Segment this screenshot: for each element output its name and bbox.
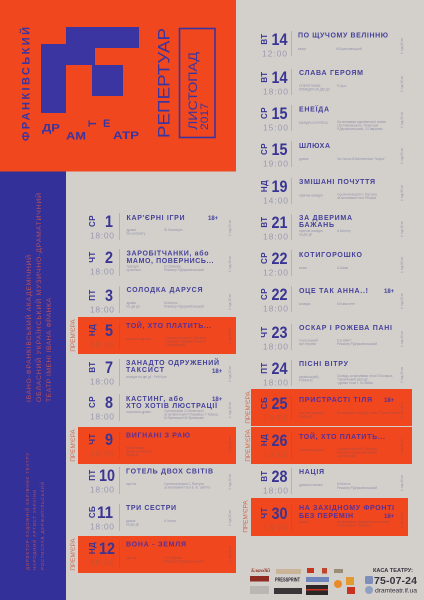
premiere row: 12: ПРЕМ'ЄРА <box>70 538 77 571</box>
row: 15 evening <box>260 140 404 168</box>
premiere row: 9: трагікомедія <box>126 446 145 450</box>
row: 15 evening: СР <box>260 143 269 155</box>
row: 23: арт-терапія <box>299 342 316 346</box>
premiere row: 30: Е.М.Ремарка. Режисер <box>337 524 371 528</box>
row: 11: на дві дії <box>126 522 139 526</box>
row: 28: 18:00 <box>263 486 288 496</box>
row: 22 evening: СР <box>260 288 269 300</box>
icon: globe <box>365 586 373 594</box>
row: 15 afternoon <box>260 104 404 132</box>
premiere row: 30: драма <box>299 520 309 524</box>
row: 10: 10 <box>99 466 115 485</box>
premiere row: 5: соціальна драма <box>126 337 151 341</box>
text: director: РОСТИСЛАВ ДЕРЖИПІЛЬСЬКИЙ <box>40 482 45 570</box>
row: 3: ПТ <box>88 289 97 301</box>
row: 15 afternoon: І.Котляревського. Режисери <box>337 124 378 128</box>
premiere row: 9: на дві дії <box>126 453 139 457</box>
premiere row: 5: Режисер Р.Держипільський <box>166 340 206 344</box>
premiere row: 12: НД <box>88 542 97 554</box>
row: 8: М.Яремишин Ж.Яремишин <box>164 416 204 420</box>
row: 15 evening: 19:00 <box>263 158 288 168</box>
panel: orange header <box>0 0 236 172</box>
premiere row: 25: на дві дії <box>299 414 312 418</box>
row: 3: 3 <box>105 286 113 305</box>
row: 11: А.Чехов <box>164 519 176 523</box>
row: 11: 11 <box>97 503 113 522</box>
row: 3: СОЛОДКА ДАРУСЯ <box>126 287 202 294</box>
premiere row: 9: 2 год 30 хв <box>228 437 232 453</box>
row: 8: 8 <box>105 393 113 412</box>
row: 8: КАСТИНГ, або <box>126 395 183 403</box>
row: 19: за мотивами п'єси Р.Баєра <box>337 196 376 200</box>
label: каса театру: КАСА ТЕАТРУ: <box>373 568 413 574</box>
row: 2: 18:00 <box>90 266 114 276</box>
premiere row: 26: 18:00 <box>263 450 288 460</box>
row: 15 afternoon: 2 год 30 хв <box>400 112 404 128</box>
row: 22 evening <box>260 285 404 314</box>
month box: 2017 <box>199 103 211 130</box>
text: director: ДИРЕКТОР-ХУДОЖНІЙ КЕРІВНИК ТЕАТРУ <box>25 453 30 570</box>
row: 21: 18:00 <box>263 232 288 242</box>
phone number: 75-07-24 <box>374 575 417 587</box>
premiere row: 12: О.Стефаник <box>164 556 183 560</box>
premiere row: 5: Сценічна версія Є.Лісіцина <box>166 336 206 340</box>
row: 21: 21 <box>272 213 288 232</box>
row: 15 afternoon: ЕНЕЇДА <box>299 106 329 114</box>
row: 19: Сценічна версія С.Пастуха <box>337 192 377 196</box>
premiere row: 5: 5 <box>105 321 113 340</box>
row: 14 tue evening: ОПЕРЕТКОВА <box>299 84 321 88</box>
row: 14 tue evening: 18:00 <box>263 86 288 96</box>
row: 7: комедія на дві дії · Рей Куні <box>126 375 167 379</box>
row: 15 afternoon: Р.Держипільський, О.Гаврилюк <box>337 127 383 131</box>
row: 7: ВТ <box>88 361 97 373</box>
row: 1: без антракту <box>126 232 146 236</box>
premiere row: 12: притча <box>126 556 136 560</box>
row: 21: лірична комедія <box>299 229 323 233</box>
premiere row: 5: ТОЙ, ХТО ПЛАТИТЬ... <box>126 321 211 330</box>
row: 8: соціальна драма <box>126 410 151 414</box>
row: 23: Режисер Р.Держипільський <box>337 342 377 346</box>
premiere row: 25: ПРЕМ'ЄРА <box>245 391 252 424</box>
row: 15 evening: 15 <box>272 140 288 159</box>
row: 22 noon: КОТИГОРОШКО <box>299 252 363 259</box>
premiere row: 12: 1 год 30 хв <box>228 546 232 562</box>
row: 23: ОСКАР І РОЖЕВА ПАНІ <box>299 325 392 332</box>
row: 8: СР <box>88 396 97 408</box>
row: 24: Сповідь за мотивами п'єси П.Козирка <box>337 374 393 378</box>
row: 1: 1 год 20 хв <box>228 220 232 236</box>
premiere row: 30: ПРЕМ'ЄРА <box>242 500 250 533</box>
row: 19: лірична комедія <box>299 194 323 198</box>
row: 14 tue noon <box>260 30 404 58</box>
row: 21: БАЖАНЬ <box>299 222 334 229</box>
row: 15 evening: ШЛЮХА <box>299 143 330 150</box>
row: 10: 2 год 20 хв <box>228 474 232 490</box>
row: 14 tue evening: 14 <box>272 68 288 87</box>
premiere row: 30: 18:00 <box>263 522 288 532</box>
sponsor logos <box>250 567 355 595</box>
row: 3: драма <box>126 301 136 305</box>
row: 23: театральний <box>299 338 318 342</box>
premiere row: 5: Сценографія <box>166 343 185 347</box>
row: 1: драма <box>126 228 136 232</box>
row: 19: ЗМІШАНІ ПОЧУТТЯ <box>299 179 375 186</box>
text: director: НАРОДНИЙ АРТИСТ УКРАЇНИ <box>32 490 37 570</box>
row: 22 evening: 18:00 <box>263 304 288 314</box>
premiere row: 25: За мотивами твору Е. Золя "Тереза Ракен" <box>337 411 400 415</box>
row: 11: драма <box>126 519 136 523</box>
premiere row: 9: ВИГНАНІ З РАЮ <box>126 433 190 440</box>
row: 11: 18:00 <box>90 522 114 532</box>
row: 7: 18:00 <box>90 376 114 386</box>
text: theatre name: ТЕАТР ІМЕНІ ІВАНА ФРАНКА <box>46 298 53 402</box>
premiere row: 26: ПРЕМ'ЄРА <box>245 429 252 462</box>
row: 22 noon: казка <box>299 266 307 270</box>
row: 7: 18+ <box>212 369 223 375</box>
heading: репертуар: РЕПЕРТУАР <box>156 28 174 138</box>
row: 2: 2 <box>105 248 113 267</box>
row: 10: притча <box>126 482 136 486</box>
row: 24: 24 <box>272 359 288 378</box>
row: 1: 18:00 <box>90 230 114 240</box>
row: 14 tue noon: 12:00 <box>262 48 287 58</box>
row: 2: МАМО, ПОВЕРНИСЬ... <box>126 258 214 265</box>
row: 21: 2 год 10 хв <box>400 221 404 237</box>
row: 19: 1 год 30 хв <box>400 185 404 201</box>
website: dramteatr.if.ua <box>375 588 417 594</box>
premiere row: 9: 9 <box>105 430 113 449</box>
row: 7: ТАКСИСТ <box>126 367 165 374</box>
premiere row: 25: 2 год 10 хв <box>400 402 404 418</box>
text: theatre name: ОБЛАСНИЙ УКРАЇНСЬКИЙ МУЗИЧНО-ДРАМАТИЧНИЙ <box>34 193 43 402</box>
icon: phone <box>365 576 373 584</box>
row: 28: М.Матіос <box>337 482 351 486</box>
row: 22 noon: 1 год 00 хв <box>400 257 404 273</box>
row: 23: 18:00 <box>263 342 288 352</box>
row: 28: 1 год 40 хв <box>400 475 404 491</box>
premiere row: 30: 18+ <box>384 514 395 520</box>
row: 2: трагедія <box>126 264 139 268</box>
row: 15 afternoon: За мотивами однойменної поеми <box>337 120 386 124</box>
row: 24: ПІСНІ ВІТРУ <box>299 361 349 368</box>
premiere row: 26: соціальна драма <box>299 448 324 452</box>
row: 28 <box>260 467 404 496</box>
heading: драм театр: Е <box>103 118 110 130</box>
box office contact <box>365 568 417 594</box>
row: 21: ЗА ДВЕРИМА <box>299 215 352 222</box>
row: 23: ЧТ <box>260 326 269 338</box>
premiere row: 9 <box>70 427 236 464</box>
premiere row: 26 <box>245 427 412 464</box>
row: 28: Режисер Р.Держипільський <box>337 486 377 490</box>
premiere row: 25: 25 <box>272 394 288 413</box>
row: 8: 1 год 40 хв <box>228 402 232 418</box>
row: 8: Сценографія О.Латанської, <box>164 409 205 413</box>
row: 28: 28 <box>272 467 288 486</box>
premiere row: 26: 2 год 30 хв <box>400 439 404 455</box>
sponsor logos: PRESSPRINT <box>275 578 301 584</box>
row: 14 tue noon: М.Братковецький <box>336 47 362 51</box>
row: 14 tue noon: 1 год 00 хв <box>400 38 404 54</box>
row: 2: Н.Семенюк <box>164 264 181 268</box>
row: 22 noon: СР <box>260 252 269 264</box>
row: 14 tue noon: казка <box>298 47 306 51</box>
premiere row: 5: ПРЕМ'ЄРА <box>70 319 77 352</box>
row: 14 tue noon: ВТ <box>260 33 269 45</box>
row: 11: ТРИ СЕСТРИ <box>126 505 176 512</box>
row: 22 evening: ОЦЕ ТАК АННА..! <box>299 288 368 295</box>
premiere row: 26: ТОЙ, ХТО ПЛАТИТЬ... <box>299 432 385 441</box>
row: 8 <box>88 393 232 422</box>
row: 21 <box>260 213 404 242</box>
premiere row: 26: НД <box>260 434 269 446</box>
row: 24: українськ(ий) <box>299 375 319 379</box>
row: 11: СБ <box>88 506 97 518</box>
text: theatre name <box>24 193 53 402</box>
row: 1: СР <box>88 215 97 227</box>
premiere row: 12: 18:00 <box>90 558 114 568</box>
row: 28: НАЦІЯ <box>299 469 324 476</box>
row: 15 evening: 1 год 50 хв <box>400 148 404 164</box>
row: 14 tue noon: ПО ЩУЧОМУ ВЕЛІННЮ <box>298 32 388 40</box>
heading: драм театр: АМ <box>66 130 86 142</box>
row: 23 <box>260 323 404 352</box>
row: 7: 2 год 20 хв <box>228 366 232 382</box>
row: 1: КАР'ЄРНІ ІГРИ <box>126 215 184 222</box>
row: 15 afternoon: 15 <box>272 104 288 123</box>
premiere row: 9: ЧТ <box>88 433 97 445</box>
row: 24 <box>260 359 404 388</box>
row: 8: 18+ <box>212 397 223 403</box>
row: 14 tue noon: 14 <box>272 30 288 49</box>
row: 22 evening: 22 <box>272 285 288 304</box>
premiere row: 25: СБ <box>260 397 269 409</box>
premiere row: 26: Сценічна версія Є.Лісіцина <box>337 447 377 451</box>
row: 10: 18:00 <box>90 484 114 494</box>
row: 28: ВТ <box>260 470 269 482</box>
premiere row: 5: 2 год 30 хв <box>228 328 232 344</box>
row: 22 noon <box>260 249 404 278</box>
row: 23: Е.Е.Шмітт <box>337 338 352 342</box>
row: 15 evening: драма <box>299 157 309 161</box>
heading: Франківський: ФРАНКІВСЬКИЙ <box>20 27 32 141</box>
premiere row: 26: 26 <box>272 431 288 450</box>
heading: драм театр: Т <box>87 120 99 127</box>
row: 14 tue evening <box>260 68 404 96</box>
row: 2: ЧТ <box>88 251 97 263</box>
row: 10: ПТ <box>88 469 97 481</box>
row: 10: ГОТЕЛЬ ДВОХ СВІТІВ <box>126 469 213 476</box>
premiere row: 12 <box>70 536 236 573</box>
row: 14 tue evening: ВТ <box>260 71 269 83</box>
row: 22 noon: 12:00 <box>263 268 288 278</box>
premiere row: 9: ПРЕМ'ЄРА <box>70 429 77 462</box>
row: 3 <box>88 286 232 314</box>
premiere row: 5: 18:00 <box>90 340 114 350</box>
row: 15 evening: За п'єсою В.Винниченка "Чорна" <box>337 157 385 161</box>
row: 15 afternoon: МАНДРИ БУРЛЕСК <box>299 121 328 125</box>
row: 21: ВТ <box>260 216 269 228</box>
premiere row: 25: 18+ <box>384 398 395 404</box>
premiere row: 25: ПРИСТРАСТІ ТІЛЯ <box>299 397 372 404</box>
month box: ЛИСТОПАД <box>188 52 200 130</box>
row: 3: М.Матіос <box>164 301 178 305</box>
row: 22 evening: М.Камолетті <box>337 302 356 306</box>
row: 1 <box>88 212 232 240</box>
row: 1: 1 <box>105 212 113 231</box>
row: 3: 18:00 <box>90 304 114 314</box>
premiere row: 30: НА ЗАХІДНОМУ ФРОНТІ <box>299 505 394 512</box>
heading: драм театр: ДР <box>42 122 60 134</box>
row: 7: ЗАНАДТО ОДРУЖЕНИЙ <box>126 358 219 367</box>
icon: theatre logo <box>41 27 139 113</box>
row: 22 noon: 22 <box>272 249 288 268</box>
premiere row: 25: трагічна комедія <box>299 411 324 415</box>
premiere row: 30 <box>242 498 408 536</box>
row: 24: РОМАНС <box>299 378 314 382</box>
row: 3: на дві дії <box>126 304 140 308</box>
row: 22 evening: 2 год 20 хв <box>400 293 404 309</box>
row: 28: драма-почекань <box>299 483 323 487</box>
premiere row: 30: БЕЗ ПЕРЕМІН <box>299 513 353 520</box>
premiere row: 30: За мотивами однойменного роману <box>337 520 390 524</box>
premiere row: 30: 2 год 10 хв <box>400 512 404 528</box>
premiere row: 26: Режисер Р.Держипільський <box>337 450 377 454</box>
row: 19: 19 <box>272 177 288 196</box>
premiere row: 12: Режисер Р.Держипільський <box>164 560 204 564</box>
heading: драм театр: АТР <box>113 130 139 142</box>
premiere row: 12: 12 <box>99 539 115 558</box>
month box <box>180 28 215 138</box>
row: 19: НД <box>260 180 269 192</box>
row: 2: сучасного <box>126 268 141 272</box>
row: 23: 1 год 40 хв <box>400 331 404 347</box>
row: 7: 7 <box>105 358 113 377</box>
row: 1: Ж.Гальперін <box>164 228 183 232</box>
row: 10: Сценічна версія С.Пастуха <box>164 482 204 486</box>
row: 14 tue evening: СЛАВА ГЕРОЯМ <box>299 70 363 77</box>
row: 24: ПТ <box>260 362 269 374</box>
row: 22 noon: А.Шиян <box>337 266 348 270</box>
premiere row: 25: 18:00 <box>263 412 288 422</box>
premiere row: 9: 19:00 <box>90 448 114 458</box>
row: 3: 2 год 40 хв <box>228 294 232 310</box>
row: 2 <box>88 248 232 276</box>
premiere row: 30: ЧТ <box>260 507 269 519</box>
row: 21: на дві дії <box>299 232 312 236</box>
text: theatre name: ІВАНО-ФРАНКІВСЬКИЙ АКАДЕМІЧНИЙ <box>24 255 33 402</box>
row: 2: 1 год 40 хв <box>228 256 232 272</box>
row: 23: 23 <box>272 323 288 342</box>
row: 8: за актами наукі Р.Лакавець Т.Тревор, <box>164 412 219 416</box>
sponsor logos: Благодій <box>250 567 270 574</box>
row: 24: і драми п'єси І. Зо Вийко <box>337 381 373 385</box>
text: director <box>25 453 45 570</box>
row: 21: А.Міллер <box>337 229 351 233</box>
row: 11 <box>88 503 232 532</box>
heading: драм театр <box>42 118 139 142</box>
row: 10: за мотивами п'єси Е.-Е. Шмітта <box>164 486 210 490</box>
row: 24: "Український рапсод" <box>337 378 368 382</box>
row: 10 <box>88 466 232 494</box>
row: 15 afternoon: СР <box>260 107 269 119</box>
row: 14 tue evening: КОМЕДІЯ НА ДВІ ДІЇ <box>299 88 330 92</box>
premiere row: 5 <box>70 317 236 354</box>
row: 8: 18:00 <box>90 412 114 422</box>
premiere row: 12: ВОНА - ЗЕМЛЯ <box>126 542 186 549</box>
panel: blue sidebar <box>0 172 66 600</box>
row: 1: 18+ <box>208 216 219 222</box>
row: 2: Режисер Р.Держипільський <box>164 268 204 272</box>
row: 8: ХТО ХОТІВ ЛЮСТРАЦІЇ <box>126 402 218 410</box>
premiere row: 5: НД <box>88 324 97 336</box>
row: 3: Режисер Р.Держипільський <box>164 304 204 308</box>
row: 19: 14:00 <box>263 196 288 206</box>
row: 24: 2 год 20 хв <box>400 367 404 383</box>
row: 22 evening: 18+ <box>384 289 395 295</box>
premiere row: 26: Сценографія <box>337 454 356 458</box>
premiere row: 25 <box>245 389 412 426</box>
row: 2: ЗАРОБІТЧАНКИ, або <box>126 250 208 258</box>
row: 22 evening: комедія <box>299 302 311 306</box>
row: 7 <box>88 358 232 386</box>
row: 14 tue evening: П.Арсі <box>337 84 347 88</box>
row: 15 afternoon: 15:00 <box>263 122 288 132</box>
premiere row: 30: 30 <box>272 504 288 523</box>
premiere row: 9: сучасного автора <box>126 450 152 454</box>
row: 11: 2 год 50 хв <box>228 510 232 526</box>
row: 14 tue evening: 2 год 10 хв <box>400 76 404 92</box>
row: 24: 18:00 <box>263 378 288 388</box>
row: 19 <box>260 177 404 206</box>
